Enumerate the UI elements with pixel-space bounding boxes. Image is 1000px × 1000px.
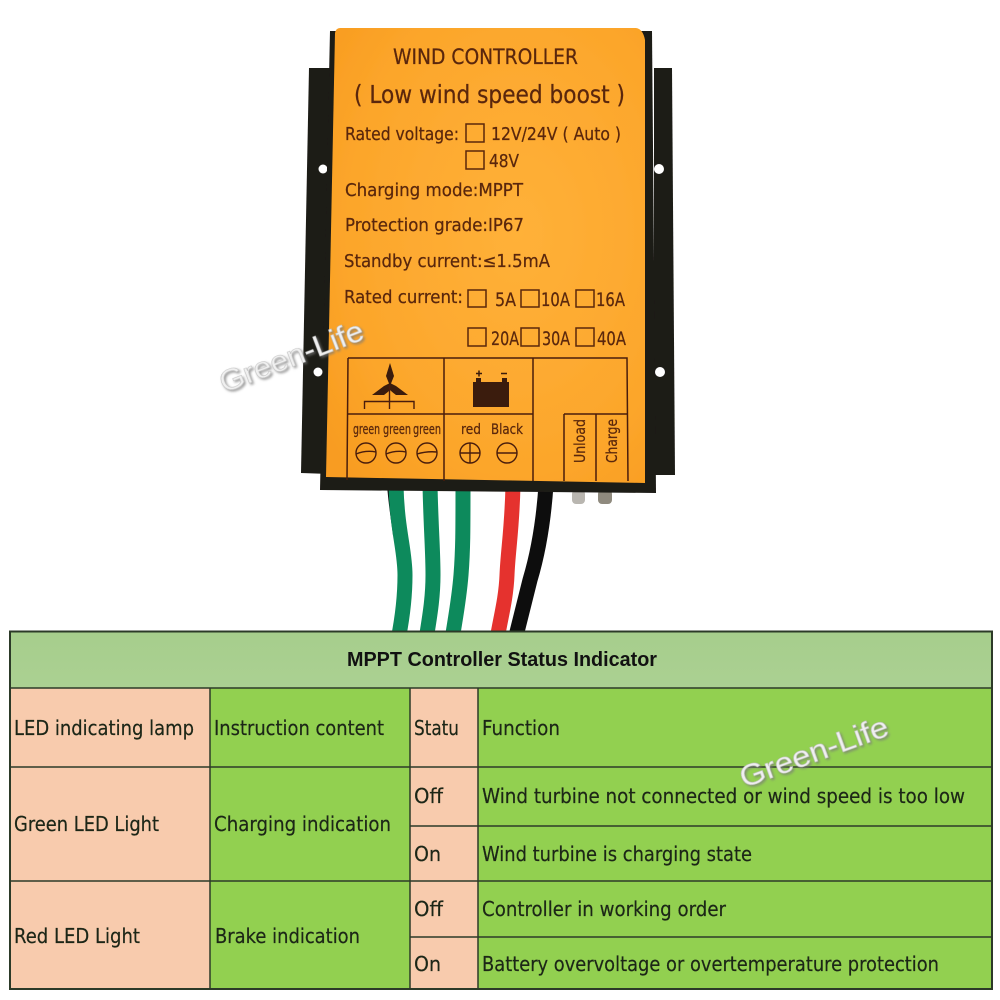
standby current: Standby current:≤1.5mA [344, 252, 550, 272]
table title: MPPT Controller Status Indicator [347, 648, 657, 671]
green LED row [14, 784, 965, 866]
terminal labels: red [461, 422, 481, 438]
orange label [326, 28, 645, 483]
green LED row: Wind turbine not connected or wind speed is too low [482, 784, 965, 808]
LED indicators [572, 490, 612, 504]
terminal labels: green [383, 422, 411, 438]
rated current: 10A [541, 289, 570, 311]
rated voltage: Rated voltage: [345, 125, 459, 145]
charging mode: Charging mode:MPPT [345, 181, 523, 201]
rated current: 5A [495, 289, 516, 311]
red LED row: Off [414, 897, 444, 921]
header row: Instruction content [214, 716, 384, 740]
status indicator table [10, 631, 992, 989]
icon: battery [473, 370, 509, 407]
protection grade: Protection grade:IP67 [345, 216, 524, 236]
header row: Function [482, 716, 560, 740]
header row: LED indicating lamp [14, 716, 194, 740]
label subtitle: ( Low wind speed boost ) [354, 80, 625, 109]
green LED row: Wind turbine is charging state [482, 842, 752, 866]
wind controller device [301, 28, 675, 640]
header row: Statu [414, 716, 459, 740]
terminal grid [347, 358, 628, 481]
label title: WIND CONTROLLER [393, 45, 578, 69]
red LED row: Controller in working order [482, 897, 727, 921]
terminal labels [353, 422, 523, 438]
red LED row: On [414, 952, 441, 976]
green LED row: Green LED Light [14, 812, 159, 836]
terminal symbols [356, 443, 517, 463]
rated voltage: 12V/24V ( Auto ) [491, 125, 621, 145]
red LED row [14, 897, 939, 976]
rated current: Rated current: [344, 288, 463, 308]
rated current: 16A [596, 289, 625, 311]
header row [14, 716, 560, 740]
rated voltage [345, 124, 621, 172]
wires [392, 485, 546, 640]
red LED row: Brake indication [215, 924, 360, 948]
terminal labels: green [353, 422, 380, 438]
rated current: 30A [542, 328, 570, 350]
green LED row: Charging indication [214, 812, 391, 836]
rated voltage: 48V [489, 152, 519, 172]
rated current: 40A [597, 328, 626, 350]
rated current: 20A [491, 328, 519, 350]
watermark: table: Green-Life [735, 710, 893, 795]
green LED row: On [414, 842, 441, 866]
charge label: Charge [603, 419, 621, 463]
terminal labels: Black [491, 422, 523, 438]
label text [344, 45, 626, 350]
red LED row: Battery overvoltage or overtemperature protection [482, 952, 939, 976]
left mounting flange [301, 68, 330, 474]
green LED row: Off [414, 784, 444, 808]
mounting holes [314, 164, 665, 377]
unload label: Unload [571, 419, 589, 463]
red LED row: Red LED Light [14, 924, 140, 948]
right mounting flange [654, 68, 675, 475]
rated current [344, 288, 626, 350]
terminal labels: green [413, 422, 441, 438]
table cell backgrounds [10, 631, 992, 989]
controller case [320, 31, 656, 493]
watermark: device: Green-Life [215, 314, 368, 400]
icon: wind turbine [364, 363, 414, 409]
